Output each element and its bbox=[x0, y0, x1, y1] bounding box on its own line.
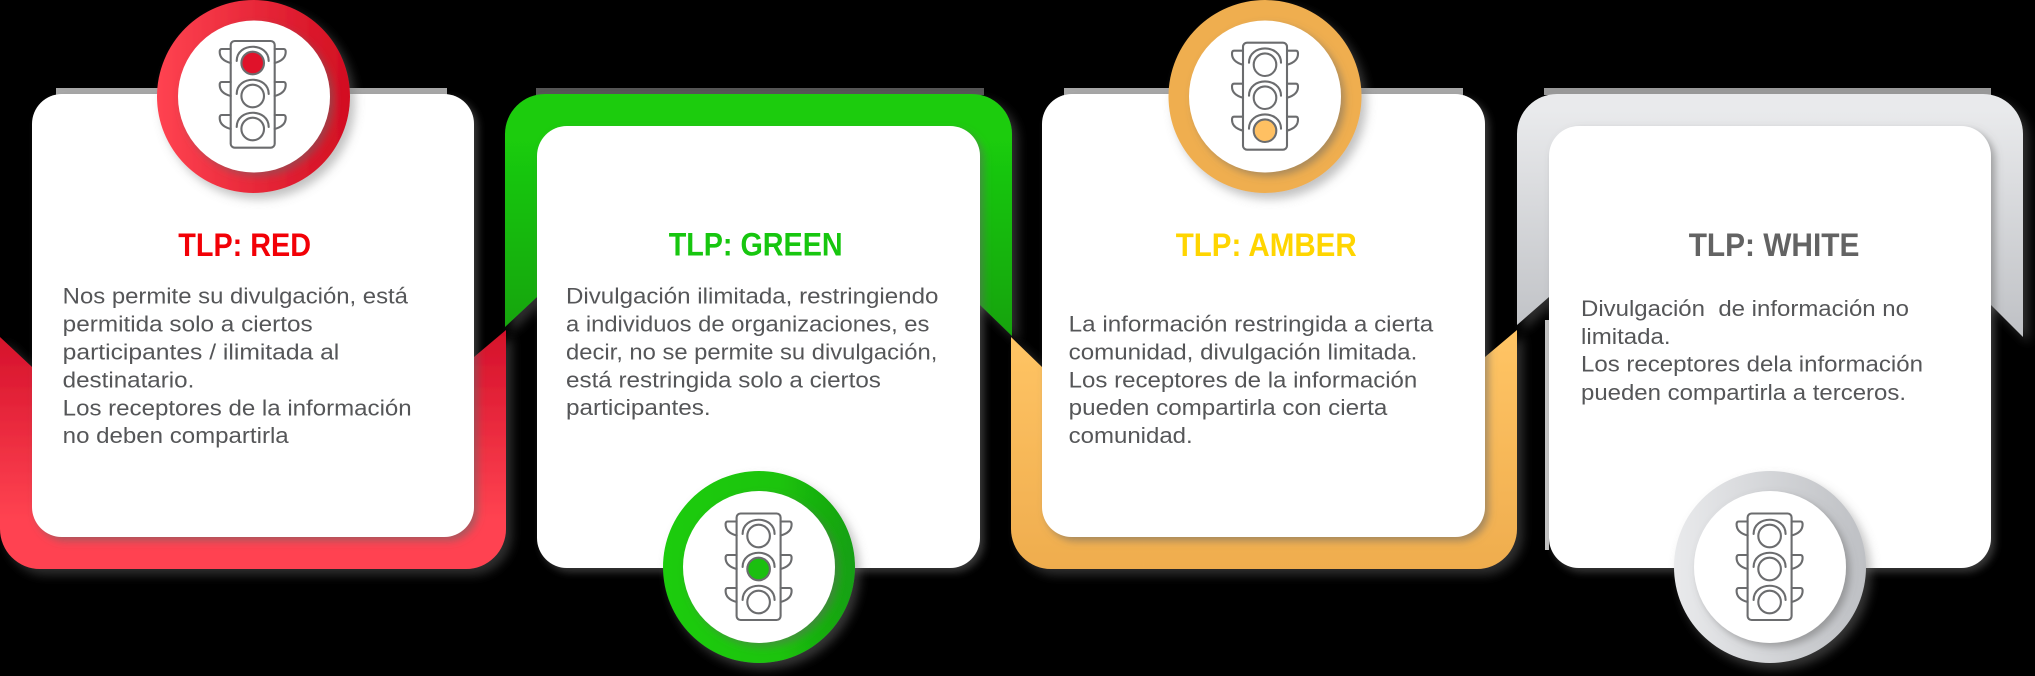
description: TLP WHITE: limitada. bbox=[1581, 324, 1671, 349]
white card bbox=[1549, 126, 1991, 568]
white card bbox=[32, 94, 474, 537]
description: TLP RED: Los receptores de la información bbox=[63, 395, 412, 420]
description: TLP RED: no deben compartirla bbox=[63, 423, 289, 448]
description: TLP GREEN: decir, no se permite su divulgación, bbox=[566, 339, 937, 364]
panel: TLP AMBER bbox=[1011, 0, 1517, 569]
heading: TLP RED: TLP: RED bbox=[178, 227, 311, 263]
description: TLP RED: destinatario. bbox=[63, 368, 194, 392]
description: TLP WHITE: pueden compartirla a terceros. bbox=[1581, 380, 1906, 405]
description: TLP GREEN bbox=[566, 283, 938, 420]
description: TLP AMBER: La información restringida a cierta bbox=[1069, 312, 1434, 337]
description: TLP RED bbox=[63, 284, 412, 448]
green traffic light badge bbox=[663, 471, 855, 663]
red ribbon band bbox=[0, 330, 506, 569]
description: TLP RED: participantes / ilimitada al bbox=[63, 340, 339, 364]
description: TLP RED: permitida solo a ciertos bbox=[63, 312, 313, 336]
description: TLP AMBER: Los receptores de la información bbox=[1069, 367, 1417, 392]
heading: TLP WHITE: TLP: WHITE bbox=[1689, 227, 1859, 263]
white card bbox=[537, 126, 980, 568]
description: TLP GREEN: Divulgación ilimitada, restringiendo bbox=[566, 283, 938, 308]
grey ribbon band bbox=[1517, 94, 2023, 337]
heading: TLP GREEN: TLP: GREEN bbox=[669, 227, 843, 263]
description: TLP RED: Nos permite su divulgación, está bbox=[63, 284, 408, 308]
white traffic light badge bbox=[1674, 471, 1866, 663]
description: TLP GREEN: está restringida solo a ciertos bbox=[566, 367, 881, 392]
green ribbon band bbox=[505, 94, 1012, 336]
description: TLP AMBER: pueden compartirla con cierta bbox=[1069, 395, 1388, 420]
heading: TLP AMBER: TLP: AMBER bbox=[1176, 227, 1357, 263]
description: TLP GREEN: a individuos de organizaciones, es bbox=[566, 312, 929, 337]
description: TLP WHITE: Los receptores dela información bbox=[1581, 352, 1923, 377]
panel: TLP GREEN bbox=[505, 88, 1012, 663]
panel: TLP RED bbox=[0, 0, 506, 569]
description: TLP WHITE: Divulgación de información no bbox=[1581, 296, 1909, 321]
description: TLP AMBER: comunidad. bbox=[1069, 423, 1193, 448]
description: TLP AMBER: comunidad, divulgación limitada. bbox=[1069, 339, 1417, 364]
amber traffic light badge bbox=[1168, 0, 1362, 193]
white card bbox=[1042, 94, 1485, 537]
description: TLP GREEN: participantes. bbox=[566, 395, 711, 420]
panel: TLP WHITE bbox=[1517, 88, 2023, 663]
description: TLP AMBER bbox=[1069, 312, 1434, 448]
amber ribbon band bbox=[1011, 330, 1517, 569]
red traffic light badge bbox=[157, 0, 350, 193]
description: TLP WHITE bbox=[1581, 296, 1923, 405]
